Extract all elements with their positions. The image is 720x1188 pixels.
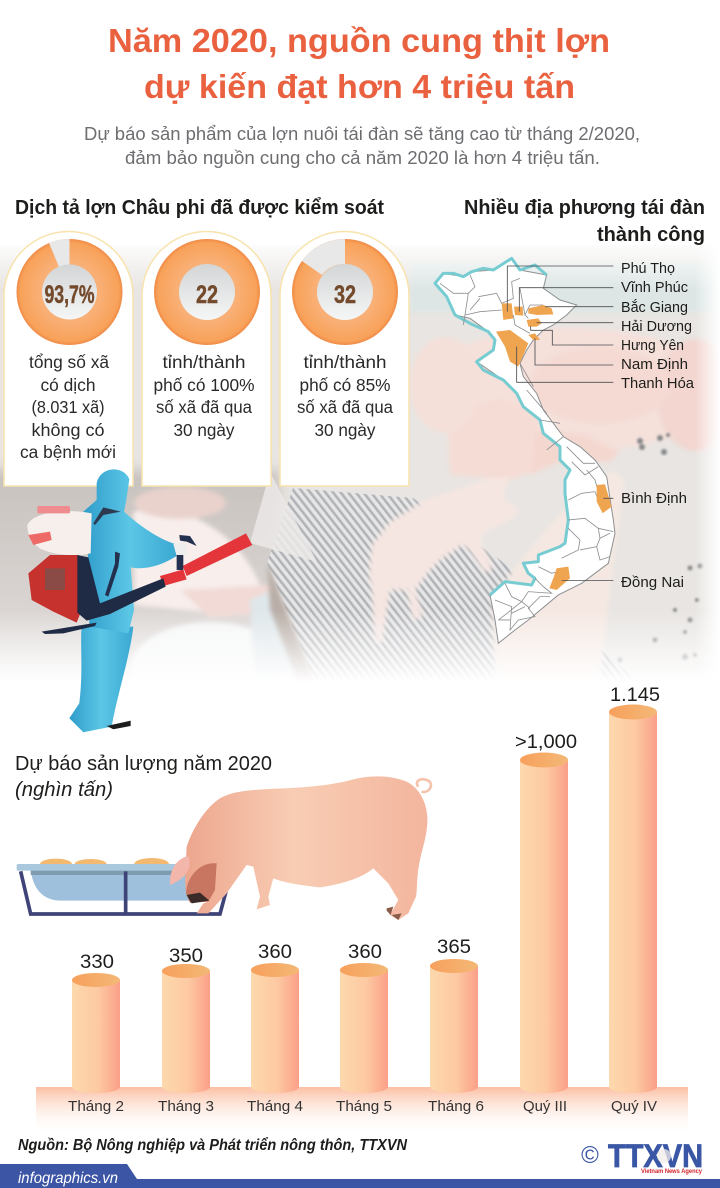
donut: 32 xyxy=(292,239,398,345)
card text xyxy=(20,352,116,462)
bar: Tháng 4: 360 xyxy=(258,942,292,963)
pig droppings xyxy=(618,433,702,662)
logo: TTXVN: © xyxy=(581,1142,599,1169)
bar chart xyxy=(36,685,688,1135)
bar: Quý IV xyxy=(609,685,660,1115)
card text: 30 ngày xyxy=(174,420,235,440)
floor grating xyxy=(267,488,640,688)
card text: có dịch xyxy=(40,375,96,395)
icon: worker spraying xyxy=(27,469,252,732)
bar: Tháng 3: 350 xyxy=(169,946,203,967)
bar: Quý IV: Quý IV xyxy=(611,1098,657,1115)
bar: Tháng 2: Tháng 2 xyxy=(68,1098,124,1115)
pig under the map xyxy=(492,470,625,684)
title xyxy=(108,22,610,105)
background photo: pig farm xyxy=(0,240,720,722)
bar: Tháng 2 xyxy=(68,952,124,1115)
footer band: infographics.vn xyxy=(18,1170,118,1187)
map labels: Đồng Nai xyxy=(621,574,684,591)
card text: 30 ngày xyxy=(314,420,376,440)
card text: số xã đã qua xyxy=(297,397,393,417)
logo: TTXVN: Vietnam News Agency xyxy=(641,1169,703,1175)
icon: pig at feeding trough xyxy=(17,776,431,920)
bar: Quý IV: 1.145 xyxy=(610,685,660,706)
donut: 22: 22 xyxy=(196,281,218,309)
map labels xyxy=(621,260,695,591)
trough xyxy=(17,858,226,914)
map: western border xyxy=(435,258,570,595)
card text: (8.031 xã) xyxy=(32,397,104,417)
bar: Tháng 6: 365 xyxy=(437,937,471,958)
chart heading: (nghìn tấn) xyxy=(15,778,113,801)
map: Vietnam provinces xyxy=(435,258,615,643)
donut: 93,7%: 93,7% xyxy=(44,281,94,309)
pigs at left behind the worker xyxy=(133,509,262,612)
card text: phố có 85% xyxy=(300,375,390,395)
card: 32 provinces xyxy=(280,231,409,486)
logo: TTXVN: TTXVN xyxy=(608,1138,703,1174)
map labels: Nam Định xyxy=(621,356,688,373)
card text: tổng số xã xyxy=(29,352,109,372)
card text xyxy=(154,352,254,440)
card text: phố có 100% xyxy=(154,375,254,395)
bar: Tháng 4 xyxy=(247,942,303,1115)
card: 22 provinces xyxy=(142,231,271,486)
bar: Quý III: >1,000 xyxy=(515,732,577,753)
map: southern province borders xyxy=(495,462,613,630)
card: 93,7% communes xyxy=(4,231,133,486)
card text: không có xyxy=(32,420,104,440)
legs xyxy=(69,627,133,732)
bar: Tháng 2: 330 xyxy=(80,952,114,973)
bar: Tháng 3: Tháng 3 xyxy=(158,1098,214,1115)
map labels: Hải Dương xyxy=(621,318,692,335)
source note: Nguồn: Bộ Nông nghiệp và Phát triển nông thôn, TTXVN xyxy=(18,1137,408,1154)
chart heading: Dự báo sản lượng năm 2020 xyxy=(15,752,272,775)
map labels: Bình Định xyxy=(621,490,687,507)
card text xyxy=(297,352,393,440)
donut: 32: 32 xyxy=(334,281,356,309)
donut: 22 xyxy=(154,239,260,345)
bar: Tháng 4: Tháng 4 xyxy=(247,1098,303,1115)
map labels: Phú Thọ xyxy=(621,260,675,277)
bar: Tháng 3 xyxy=(158,946,214,1115)
card text: số xã đã qua xyxy=(156,397,252,417)
bar: Tháng 5: 360 xyxy=(348,942,382,963)
map: central province borders xyxy=(520,363,595,463)
chart floor xyxy=(36,1087,688,1135)
central standing pig xyxy=(369,478,519,643)
bar: Tháng 5 xyxy=(336,942,392,1115)
bar: Tháng 5: Tháng 5 xyxy=(336,1098,392,1115)
spray cone xyxy=(250,472,317,562)
map labels: Vĩnh Phúc xyxy=(621,279,688,296)
subtitle: đảm bảo nguồn cung cho cả năm 2020 là hơn 4 triệu tấn. xyxy=(125,148,600,168)
bar: Tháng 6 xyxy=(428,937,484,1115)
map: northern province borders xyxy=(440,275,543,333)
bar: Tháng 6: Tháng 6 xyxy=(428,1098,484,1115)
bar: Quý III: Quý III xyxy=(523,1098,567,1115)
map labels: Hưng Yên xyxy=(621,337,684,354)
map labels: Bắc Giang xyxy=(621,299,688,316)
donut: 93,7% xyxy=(16,239,122,345)
map: highlighted provinces xyxy=(496,303,612,590)
title: Năm 2020, nguồn cung thịt lợn xyxy=(108,22,610,59)
map: leader lines xyxy=(507,266,613,581)
bar: Quý III xyxy=(515,732,577,1115)
card text: tỉnh/thành xyxy=(304,352,386,372)
map labels: Thanh Hóa xyxy=(621,375,695,392)
heading: restocking xyxy=(464,196,705,246)
map land xyxy=(435,258,615,643)
heading: disease controlled: Dịch tả lợn Châu phi đã được kiểm soát xyxy=(15,196,384,219)
heading: restocking: Nhiều địa phương tái đàn xyxy=(464,196,705,219)
card text: ca bệnh mới xyxy=(20,442,116,462)
subtitle: Dự báo sản phẩm của lợn nuôi tái đàn sẽ tăng cao từ tháng 2/2020, xyxy=(84,124,640,144)
subtitle xyxy=(84,124,640,168)
chart heading xyxy=(15,752,272,801)
footer band xyxy=(0,1164,720,1188)
heading: restocking: thành công xyxy=(597,223,705,246)
pig xyxy=(170,776,431,920)
card text: tỉnh/thành xyxy=(162,352,246,372)
title: dự kiến đạt hơn 4 triệu tấn xyxy=(144,68,575,105)
torso and hood xyxy=(83,469,177,633)
